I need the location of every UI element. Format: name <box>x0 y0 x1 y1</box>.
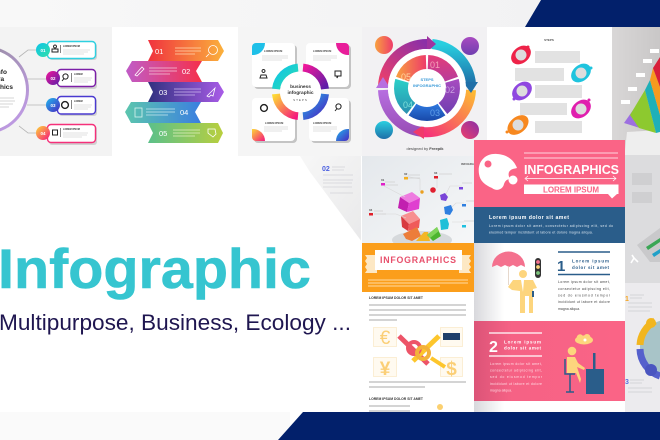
step 1: dolor sit amet <box>572 265 610 270</box>
step 2 band: sed do eiusmod tempor <box>490 375 543 379</box>
step 04: LOREM IPSUM <box>63 128 80 131</box>
splash magenta <box>567 96 595 122</box>
step 2 band: consectetur adipiscing elit, <box>490 368 542 372</box>
orange banner <box>362 243 474 292</box>
mini page 02: 02 <box>322 166 330 173</box>
panel: circular steps infographic <box>362 27 487 156</box>
step 04 <box>36 124 97 145</box>
card top right: LOREM IPSUM <box>313 49 331 53</box>
pink header: INFOGRAPHICS <box>524 163 619 177</box>
blue band <box>474 207 625 243</box>
step labels: 1 <box>625 296 629 303</box>
pink header <box>474 140 625 207</box>
ribbon 01: 01 <box>155 47 163 56</box>
pie wedges: 01 <box>430 60 440 70</box>
navy corner top right <box>525 0 660 27</box>
stairs <box>637 228 660 262</box>
orange banner: INFOGRAPHICS <box>380 255 456 265</box>
step 01 <box>36 42 97 60</box>
step 1: consectetur adipiscing elit, <box>558 287 610 291</box>
credit: designed by Freepik <box>407 146 444 151</box>
centre label: STEPS <box>293 98 308 102</box>
blue band: Lorem ipsum dolor sit amet, consectetur adipiscing elit, sed do <box>489 224 613 228</box>
small red ball <box>430 187 436 193</box>
cube orange <box>403 227 421 241</box>
cube green <box>427 227 441 241</box>
blue band: eiusmod tempor incididunt ut labore et dolore magna aliqua. <box>489 230 593 234</box>
panel: isometric stairs report: 3 <box>625 379 629 386</box>
cube yellow <box>416 232 430 241</box>
pie wedges: 03 <box>430 108 440 118</box>
lower text block: LOREM IPSUM DOLOR SIT AMET <box>369 397 424 401</box>
small orange ball <box>420 190 424 194</box>
card bottom left: LOREM IPSUM <box>265 121 283 125</box>
step 2 band: dolor sit amet <box>504 346 542 350</box>
lower text block <box>369 382 466 411</box>
title: Infographic <box>0 237 311 300</box>
splash cyan <box>567 60 595 86</box>
step 04: 04 <box>40 131 46 136</box>
step 2 band: 2 <box>489 339 498 356</box>
mini page 02 <box>322 166 353 193</box>
thought cloud <box>575 334 593 344</box>
step 03: 03 <box>50 103 56 108</box>
text block <box>369 296 466 320</box>
text block: LOREM IPSUM DOLOR SIT AMET <box>369 296 424 300</box>
step 2 band <box>474 321 625 401</box>
navy bar bottom right <box>278 412 660 440</box>
step 1: Lorem ipsum <box>572 258 609 264</box>
ribbon 02: 02 <box>182 67 190 76</box>
splash red <box>507 42 535 68</box>
callout labels: 04 <box>369 208 373 212</box>
hub label: STEPS <box>420 77 434 82</box>
step 1: 1 <box>557 258 565 275</box>
cube purple <box>440 193 448 201</box>
panel: 3D cone <box>612 27 660 160</box>
step 2 band: incididunt ut labore et dolore <box>490 382 542 386</box>
card top left: LOREM IPSUM <box>264 49 282 53</box>
splash purple <box>508 78 536 104</box>
ribbon 04: 04 <box>180 108 188 117</box>
hub label: INFOGRAPHIC <box>413 83 441 88</box>
step 1: sed do eiusmod tempor <box>558 294 611 298</box>
cube magenta <box>398 192 420 212</box>
step 02 <box>46 70 97 89</box>
callout labels <box>369 162 481 228</box>
step 02: LOREM <box>74 73 83 76</box>
panel: five arrow ribbons <box>112 27 238 156</box>
poster: cube infographic <box>361 156 481 412</box>
panel: business infographic steps wheel <box>238 27 362 156</box>
panel: isometric stairs report <box>625 155 660 412</box>
step 01: 01 <box>40 48 46 53</box>
step 2 band: magna aliqua. <box>490 388 512 392</box>
step 02: 02 <box>50 76 56 81</box>
step 01: LOREM IPSUM <box>63 45 80 48</box>
panel: brush steps <box>487 27 612 145</box>
callout labels: 03 <box>434 171 438 175</box>
pie wedges: 05 <box>401 72 411 82</box>
step 1: incididunt ut labore et dolore <box>558 300 610 304</box>
corner circle orange <box>375 36 393 54</box>
subtitle: Multipurpose, Business, Ecology ... <box>0 310 351 335</box>
callout labels: 02 <box>404 172 408 176</box>
currency icons: ¥ <box>380 359 391 380</box>
step 1: magna aliqua. <box>558 307 580 311</box>
poster: pink infographics <box>474 140 625 412</box>
ring photo <box>640 318 660 376</box>
currency icons: € <box>380 328 391 349</box>
callout labels: INFOGRAPHIC <box>461 162 481 166</box>
card bottom right: LOREM IPSUM <box>313 121 331 125</box>
cube red <box>401 211 420 231</box>
centre label: business <box>290 84 311 90</box>
step 2 band: Lorem ipsum dolor sit amet, <box>490 362 542 366</box>
currency icons <box>374 328 462 380</box>
step 1: Lorem ipsum dolor sit amet, <box>558 280 610 284</box>
ring segments <box>276 68 325 116</box>
runner <box>631 255 638 263</box>
blue band: Lorem ipsum dolor sit amet <box>489 215 569 221</box>
cube cyan <box>440 218 449 230</box>
heading: STEPS <box>544 38 554 42</box>
panel: circle with four steps <box>0 27 112 156</box>
exchange knot <box>399 336 445 367</box>
brush bars <box>515 51 582 133</box>
cube blue <box>444 205 453 215</box>
pie wedges <box>394 55 460 121</box>
step 2 band: Lorem ipsum <box>504 340 541 344</box>
main disc <box>0 46 29 134</box>
step 1 <box>557 252 611 311</box>
callout labels: 01 <box>381 178 385 182</box>
splash orange <box>504 111 532 139</box>
desk worker <box>565 347 604 394</box>
step 03: LOREM <box>74 100 83 103</box>
ribbon 05: 05 <box>159 129 167 138</box>
step 03 <box>46 96 97 116</box>
centre label <box>280 72 321 112</box>
currency icons: $ <box>446 359 457 380</box>
umbrella figure <box>492 252 537 313</box>
pie wedges: 04 <box>403 100 413 110</box>
corner circle teal <box>375 121 393 139</box>
traffic light <box>535 258 541 278</box>
ribbon 03: 03 <box>159 88 167 97</box>
icon: palette <box>479 154 518 190</box>
pie wedges: 02 <box>445 85 455 95</box>
outer ring arrows <box>383 44 471 132</box>
corner circle purple <box>461 37 479 55</box>
pink header: LOREM IPSUM <box>543 186 599 194</box>
corner circle pink <box>461 121 479 139</box>
hub label <box>410 71 444 105</box>
plinth <box>392 231 452 249</box>
centre label: infographic <box>287 90 314 96</box>
